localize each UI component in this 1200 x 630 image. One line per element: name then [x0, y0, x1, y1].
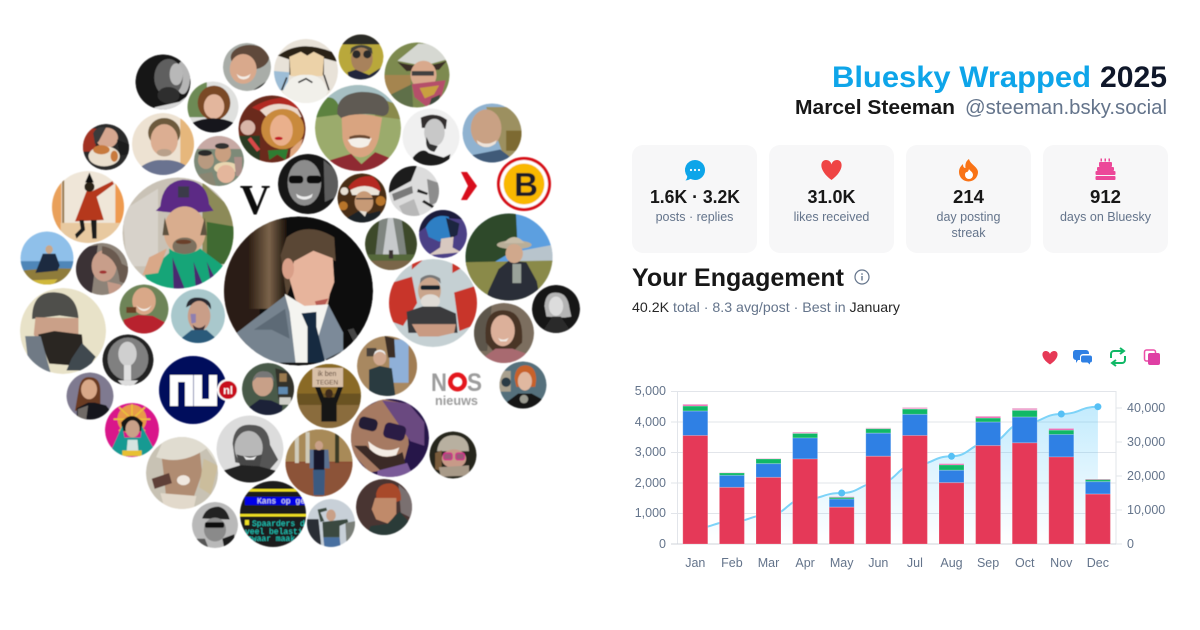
month labels: Aug [940, 556, 963, 570]
chart legend [1042, 348, 1160, 366]
month labels: Jul [907, 556, 923, 570]
avatar: elderly man by a window [357, 336, 417, 396]
avatar: man shielding eyes outdoors [307, 499, 355, 547]
bar: Dec [1085, 479, 1110, 544]
panel: days on Bluesky stat card [1043, 145, 1168, 253]
avatar: teletext screen: veel belasting [245, 528, 312, 537]
avatar: man sitting on a cliff by the sea [21, 232, 74, 284]
icon: chat bubble [685, 160, 705, 180]
avatar: person holding sign reading ik ben tegen: ik ben [318, 371, 337, 378]
avatar: close-up smiling man with glasses on purple [351, 399, 429, 477]
stat value: 912 [1090, 187, 1121, 207]
avatar: dark-haired woman [76, 243, 128, 295]
avatar: red-haired man in profile [356, 479, 412, 535]
logo: NOS nieuws: nieuws [435, 393, 478, 408]
panel: posts and replies stat card [632, 145, 757, 253]
avatar: man in white hat in a landscape [466, 214, 552, 300]
avatar: black and white portrait of blonde woman [532, 285, 580, 333]
month labels: Nov [1050, 556, 1073, 570]
bar: Mar [756, 459, 781, 544]
month labels: Jun [868, 556, 888, 570]
avatar: teletext screen: Spaarders die [252, 520, 315, 529]
bar: Nov [1049, 428, 1074, 544]
icon: flame [959, 159, 978, 182]
legend icon: likes heart [1042, 351, 1058, 364]
right axis labels: 30,000 [1127, 435, 1165, 449]
cumulative area [695, 407, 1098, 544]
chart: monthly engagement stacked bars with cumulative line [635, 384, 1165, 570]
stat label: likes received [794, 210, 869, 224]
left axis and grid: 3,000 [635, 445, 666, 459]
left axis and grid: 4,000 [635, 415, 666, 429]
month labels: Sep [977, 556, 999, 570]
left axis and grid: 1,000 [635, 506, 666, 520]
panel: avatar bubble cluster [20, 34, 580, 548]
avatar: man with long hair in black and white [216, 416, 284, 482]
avatar: man with purple cap and green shirt [122, 178, 234, 288]
avatar: smiling man with brown hair [223, 43, 271, 91]
right axis labels: 10,000 [1127, 503, 1165, 517]
avatar: man in blue shirt [132, 113, 194, 175]
bar: Jul [902, 407, 927, 544]
avatar: group selfie [194, 136, 244, 186]
avatar: smiling man in flat cap [315, 85, 401, 171]
cumulative points [838, 403, 1101, 496]
panel: likes stat card [769, 145, 894, 253]
bar: Oct [1012, 408, 1037, 544]
avatar: blonde woman in santa hat [238, 96, 306, 162]
legend icon: quotes [1144, 350, 1160, 365]
logo: NOS nieuws: S [467, 369, 482, 397]
avatar: woman in red dress [52, 171, 124, 243]
avatar: teletext screen: zwaar maak [247, 535, 295, 544]
stat label: days on Bluesky [1060, 210, 1152, 224]
logo: serif V: V [240, 178, 270, 224]
avatar: person holding sign reading ik ben tegen: TEGEN [316, 379, 338, 386]
bar: Jan [683, 404, 708, 544]
bar: May [829, 497, 854, 544]
avatar: man in autumn forest [286, 430, 352, 496]
handle: @steeman.bsky.social [965, 97, 1167, 119]
icon: info [855, 270, 869, 284]
avatar: red-haired woman [500, 362, 546, 408]
stat value: 1.6K · 3.2K [650, 187, 740, 207]
icon: cake [1096, 158, 1116, 180]
stat value: 214 [953, 187, 984, 207]
month labels: May [830, 556, 854, 570]
avatar: teletext screen: Kans op gel [257, 498, 310, 506]
engagement summary: 40.2K total · 8.3 avg/post · Best in January [632, 299, 900, 315]
title: Bluesky Wrapped [832, 61, 1091, 94]
logo: yellow B roundel: B [514, 166, 538, 203]
logo: NU.nl [159, 356, 239, 424]
avatar: man with beanie and big beard [20, 288, 106, 374]
month labels: Jan [685, 556, 705, 570]
title year: 2025 [1100, 61, 1167, 94]
month labels: Mar [758, 556, 779, 570]
avatar: grey-haired man in studio [242, 363, 294, 415]
avatar: man in santa hat with lights [338, 174, 386, 222]
legend icon: reposts [1111, 348, 1125, 366]
icon: red chevron logo [461, 172, 477, 200]
bar: Apr [793, 432, 818, 544]
left axis and grid: 0 [659, 537, 666, 551]
left axis and grid [635, 384, 1122, 551]
stat label: day posting [937, 210, 1001, 224]
avatar: main portrait of man in a grey suit [224, 216, 373, 366]
bar: Jun [866, 428, 891, 544]
avatar: smiling woman with wavy hair [474, 303, 534, 363]
right axis labels [1127, 401, 1165, 551]
avatar: man with sunglasses in monochrome [278, 154, 338, 214]
right axis labels: 20,000 [1127, 469, 1165, 483]
avatar: magenta portrait with yellow halo and teal cloak [105, 403, 159, 457]
logo: NOS nieuws: N [431, 369, 447, 397]
right axis labels: 0 [1127, 537, 1134, 551]
stacked bars [683, 404, 1110, 544]
avatar: drawn cat illustration [274, 39, 338, 103]
avatar: woman with auburn hair [188, 82, 238, 132]
stat label: posts · replies [656, 210, 733, 224]
stat label second line: streak [951, 226, 986, 240]
month labels: Apr [795, 556, 815, 570]
avatar: man with cap and sunglasses in monochrome [192, 502, 238, 548]
right axis labels: 40,000 [1127, 401, 1165, 415]
avatar: teletext screen [240, 481, 315, 547]
month labels: Dec [1087, 556, 1109, 570]
avatar: bald man outdoors [462, 104, 522, 162]
avatar: person in front of waterfall [365, 218, 417, 270]
bar: Sep [976, 416, 1001, 544]
avatar: man with black glasses on yellow [338, 34, 384, 80]
avatar: man in red jacket [120, 284, 168, 334]
legend icon: replies bubbles [1073, 350, 1092, 364]
avatar: bearded man with sunglasses in front of red and white flag [389, 259, 477, 347]
avatar: person holding sign reading ik ben tegen [297, 364, 361, 428]
heading: Your Engagement: Your Engagement [632, 264, 845, 292]
left axis and grid: 2,000 [635, 476, 666, 490]
avatar: person with orange and white cat [83, 124, 129, 170]
avatar: woman on purple background [66, 372, 114, 420]
avatar: woman with beanie and pink glasses [430, 432, 476, 478]
month labels: Oct [1015, 556, 1035, 570]
panel: posting streak stat card [906, 145, 1031, 253]
display name: Marcel Steeman [795, 97, 955, 119]
logo: yellow B roundel [497, 157, 551, 211]
logo: NU.nl: nl [223, 385, 233, 397]
avatar: black and white man with beard [402, 108, 460, 166]
avatar: abstract black and white portrait [389, 166, 439, 216]
avatar: black and white bearded man [136, 54, 190, 110]
logo: NOS nieuws [431, 369, 482, 408]
left axis and grid: 5,000 [635, 384, 666, 398]
icon: heart [821, 160, 842, 180]
month labels [685, 556, 1109, 570]
bar: Aug [939, 464, 964, 544]
avatar: woman in sun hat with scarf [384, 42, 450, 108]
cumulative line [695, 407, 1098, 528]
month labels: Feb [721, 556, 743, 570]
avatar: mosaic portrait of man [171, 289, 225, 343]
avatar: person peeking through a paper hood [146, 437, 218, 509]
avatar: curly-haired woman with praying hands [102, 334, 154, 386]
bar: Feb [719, 473, 744, 544]
avatar: blue-painted bust [419, 210, 467, 258]
stat value: 31.0K [808, 187, 856, 207]
